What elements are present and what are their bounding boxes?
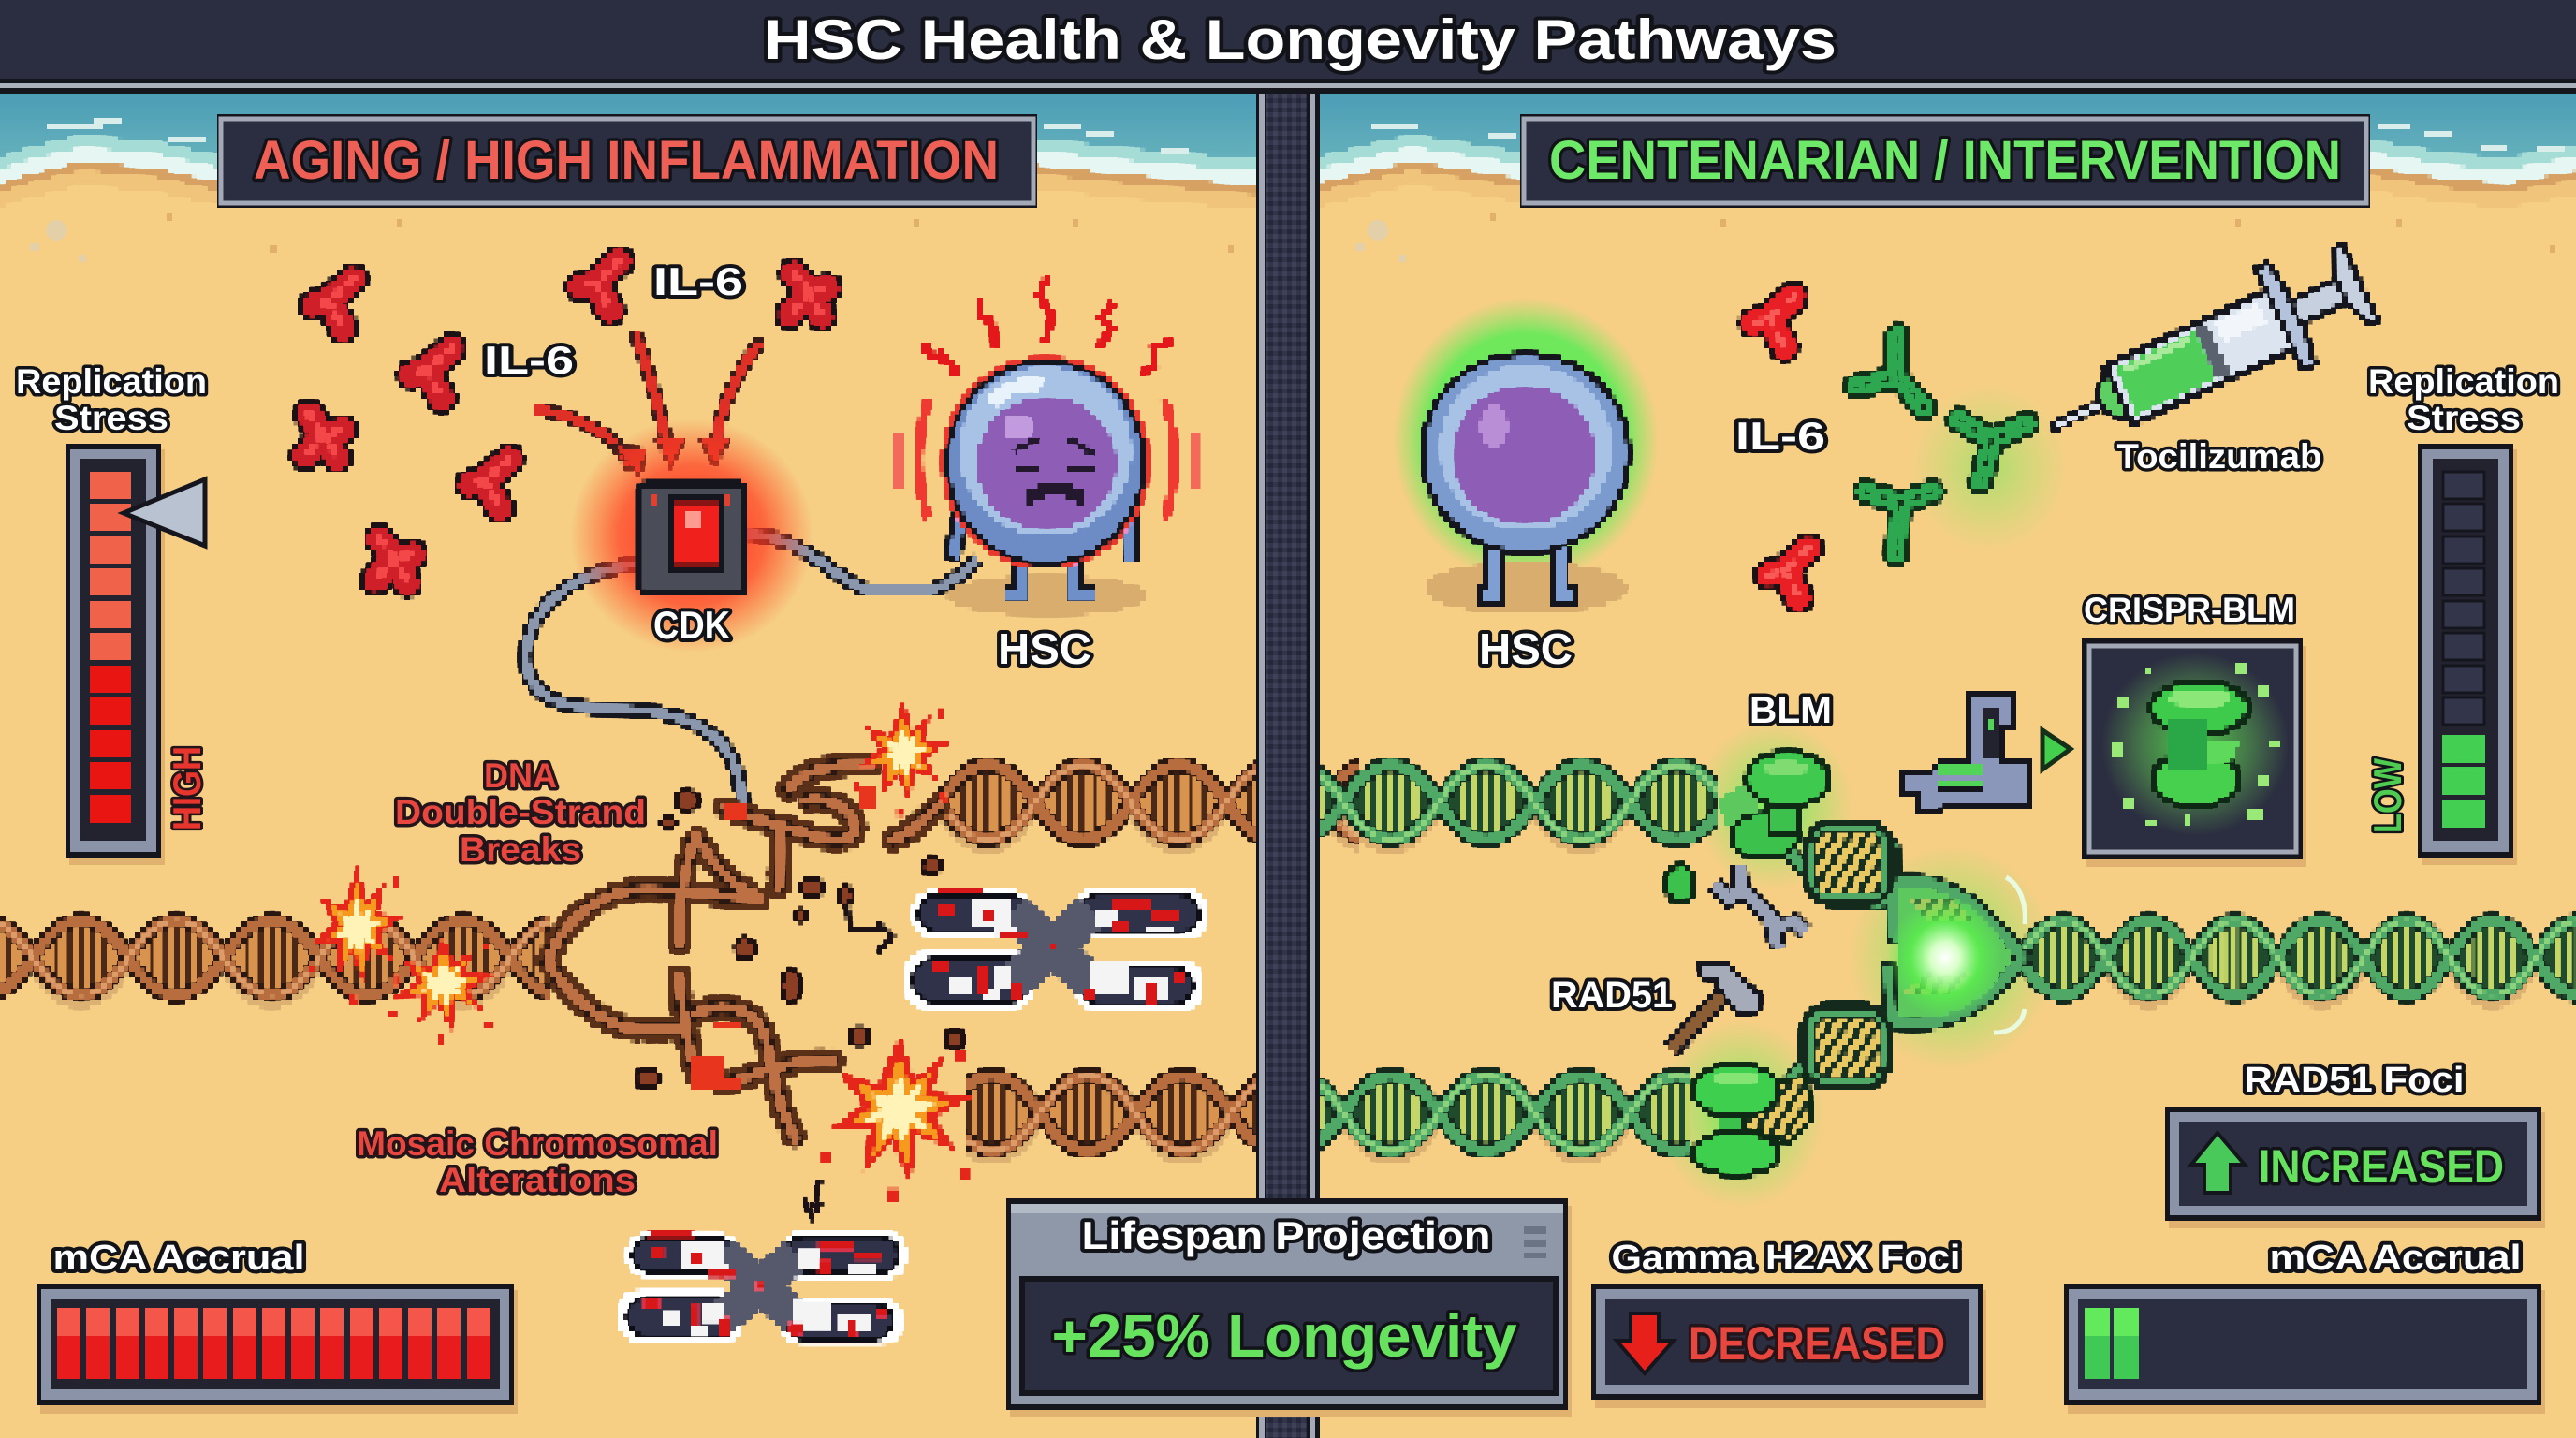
break arrows — [803, 899, 893, 1217]
label: mosaic chromosomal alterations: Alterations — [439, 1161, 636, 1199]
gauge label — [16, 362, 207, 437]
explosions — [309, 701, 973, 1202]
IL-6 labels — [484, 259, 743, 382]
BLM enzyme — [1718, 752, 1829, 858]
IL-6 labels: IL-6 — [653, 259, 743, 303]
DNA repair: right strands — [1313, 721, 2576, 1208]
small green drop — [1666, 865, 1694, 902]
HIGH label: HIGH — [165, 746, 209, 830]
mCA accrual low — [2064, 1239, 2545, 1414]
IL-6 cytokines — [1754, 297, 1808, 598]
gauge label: Replication — [16, 362, 207, 401]
banner: aging — [217, 114, 1037, 208]
longevity value: +25% Longevity — [1052, 1302, 1517, 1370]
BLM label: BLM — [1749, 690, 1832, 731]
CRISPR tool icon — [1904, 695, 2027, 813]
panel: intervention pathway — [1393, 232, 2383, 673]
helix strands — [1313, 751, 2576, 1175]
title: HSC Health & Longevity Pathways — [764, 8, 1837, 71]
label: mosaic chromosomal alterations: Mosaic Chromosomal — [357, 1124, 718, 1163]
up arrow — [2191, 1133, 2245, 1193]
pointer — [124, 479, 205, 546]
stressed HSC cell — [899, 275, 1194, 616]
hammer icon — [1671, 964, 1762, 1050]
lifespan projection panel — [1006, 1198, 1572, 1417]
broken fork strands — [548, 765, 940, 1139]
enzyme — [2110, 665, 2280, 828]
label: Gamma H2AX Foci — [1612, 1239, 1960, 1278]
gauge: replication stress low — [2365, 362, 2559, 865]
green arrow — [2042, 730, 2071, 770]
RAD51 label: RAD51 — [1551, 975, 1673, 1016]
Tocilizumab label: Tocilizumab — [2117, 437, 2321, 476]
HSC label: HSC — [1479, 624, 1573, 673]
label: DNA double-strand breaks: DNA — [484, 756, 557, 795]
red break ends — [691, 786, 876, 1090]
label: mCA Accrual — [52, 1239, 305, 1278]
debris — [636, 791, 963, 1088]
IL-6 label: IL-6 — [1735, 414, 1825, 458]
panel title: Lifespan Projection — [1082, 1213, 1490, 1257]
sparkles — [2110, 665, 2280, 828]
tocilizumab antibodies — [1855, 335, 2069, 554]
gamma H2AX readout: DECREASED — [1689, 1317, 1945, 1370]
gauge label: Replication — [2368, 362, 2559, 401]
label: DNA double-strand breaks: Breaks — [460, 830, 581, 869]
IL-6 cytokines — [305, 261, 827, 582]
gauge: replication stress high — [16, 362, 209, 865]
CDK label: CDK — [653, 603, 730, 647]
bars — [2085, 1308, 2139, 1379]
repair fork lenses — [1803, 822, 2012, 1088]
down arrow — [1617, 1313, 1674, 1373]
syringe — [2029, 232, 2383, 476]
healthy HSC cell — [1393, 298, 1659, 614]
wrench icon — [1715, 866, 1805, 947]
banner: aging: AGING / HIGH INFLAMMATION — [254, 130, 999, 191]
stress lines — [899, 275, 1194, 519]
wires — [526, 534, 978, 819]
label: DNA double-strand breaks — [395, 756, 646, 869]
damaged chromosomes — [619, 888, 1208, 1344]
repair spark — [1887, 896, 2003, 1020]
label: mCA Accrual — [2269, 1239, 2522, 1278]
DNA damage: left strands — [0, 701, 1361, 1344]
RAD51 enzyme — [1693, 1064, 1811, 1175]
RAD51 foci readout: INCREASED — [2259, 1140, 2504, 1193]
banner: centenarian — [1520, 114, 2370, 208]
CRISPR-BLM panel — [2082, 638, 2306, 867]
label: mosaic chromosomal alterations — [357, 1124, 718, 1199]
CDK switch — [570, 418, 813, 653]
IL-6 labels: IL-6 — [484, 338, 574, 382]
repair arcs — [1994, 877, 2025, 1033]
CRISPR-BLM label: CRISPR-BLM — [2084, 591, 2295, 629]
RAD51 foci readout — [2165, 1061, 2545, 1228]
repair glow — [1657, 721, 2055, 1208]
gauge label — [2368, 362, 2559, 437]
banner: centenarian: CENTENARIAN / INTERVENTION — [1549, 130, 2341, 191]
gauge label: Stress — [54, 399, 168, 437]
LOW label: LOW — [2365, 758, 2409, 833]
label: DNA double-strand breaks: Double-Strand — [395, 793, 646, 831]
header bar — [0, 0, 2576, 94]
gamma H2AX readout — [1591, 1239, 1986, 1408]
gauge label: Stress — [2407, 399, 2521, 437]
HSC label: HSC — [998, 624, 1091, 673]
bars — [57, 1308, 490, 1379]
panel: aging pathway — [305, 259, 1194, 819]
label: RAD51 Foci — [2245, 1061, 2464, 1100]
mCA accrual high — [37, 1239, 518, 1414]
sad face — [1013, 438, 1095, 506]
arrows to CDK — [538, 337, 758, 476]
center divider — [1256, 94, 1320, 1438]
